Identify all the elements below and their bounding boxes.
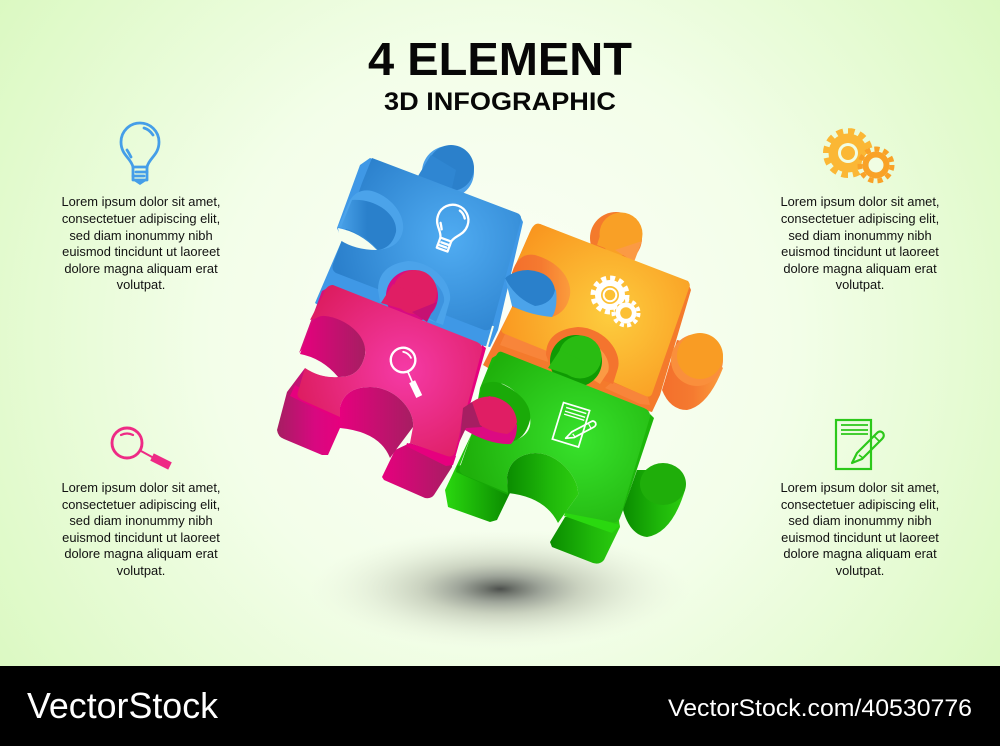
icon: pink magnifier [112,428,170,466]
text block: bottom right: dolore magna aliquam erat [783,546,937,561]
icon: white gears [593,278,638,326]
text block: top right: volutpat. [836,277,884,292]
text block: bottom left: dolore magna aliquam erat [64,546,218,561]
blue top knob [418,145,474,198]
text block: top right: dolore magna aliquam erat [783,261,937,276]
text block: top right: euismod tincidunt ut laoreet [781,244,939,259]
icon: white bulb on blue [428,200,473,255]
text block: bottom left: euismod tincidunt ut laoreet [62,530,220,545]
puzzle piece: orange [483,212,723,412]
green top knob [548,335,602,387]
left socket wall [300,316,365,377]
text block: bottom right: consectetuer adipiscing elit, [781,497,939,512]
icon: blue light bulb [121,123,159,185]
text block: bottom left: consectetuer adipiscing elit, [62,497,220,512]
icon: white magnifier [382,343,438,397]
bottom socket [378,261,450,325]
text block: top left: volutpat. [117,277,165,292]
title: 4 ELEMENT [368,33,632,85]
text block: bottom right: volutpat. [836,563,884,578]
puzzle piece: pink [277,270,486,498]
icon: green document [836,420,884,469]
text block: bottom left: sed diam inonummy nibh [69,513,213,528]
left socket [512,255,570,317]
puzzle piece: green [445,335,686,564]
text block: bottom right: sed diam inonummy nibh [788,513,932,528]
bottom socket wall [340,387,413,458]
text block: top left: consectetuer adipiscing elit, [62,211,220,226]
footer url: VectorStock.com/40530776 [668,695,972,722]
orange right knob [662,333,723,410]
icon: orange gears [826,131,892,181]
lower-right block [550,515,620,564]
lower-left block [277,368,340,455]
text block: top left: Lorem ipsum dolor sit amet, [61,194,221,209]
text block: top left: sed diam inonummy nibh [69,228,213,243]
subtitle: 3D INFOGRAPHIC [384,88,616,116]
puzzle piece: blue [315,145,523,347]
text block: top right: sed diam inonummy nibh [788,228,932,243]
bottom socket wall [507,453,578,523]
bottom socket [546,327,619,384]
footer logo: VectorStock [27,685,219,726]
pink gap line [474,326,493,392]
left socket [472,382,530,442]
text block: bottom right: Lorem ipsum dolor sit amet, [780,480,940,495]
text block: top left: dolore magna aliquam erat [64,261,218,276]
footer bar [0,666,1000,746]
pink top knob [381,270,438,322]
bottom band [500,334,650,405]
floor shadow [310,529,690,649]
text block: bottom right: euismod tincidunt ut laoreet [781,530,939,545]
text block: bottom left: Lorem ipsum dolor sit amet, [61,480,221,495]
icon: white document [552,403,599,450]
lower-right block [382,443,453,498]
text block: top right: consectetuer adipiscing elit, [781,211,939,226]
left socket [338,190,403,250]
text block: top left: euismod tincidunt ut laoreet [62,244,220,259]
green right knob [623,463,686,537]
text block: bottom left: volutpat. [117,563,165,578]
text block: top right: Lorem ipsum dolor sit amet, [780,194,940,209]
orange top knob [590,212,642,264]
upper-left side [299,285,333,353]
blue knob over orange socket [505,270,556,317]
lower-left block [445,433,510,522]
pink knob over green socket [458,396,517,445]
